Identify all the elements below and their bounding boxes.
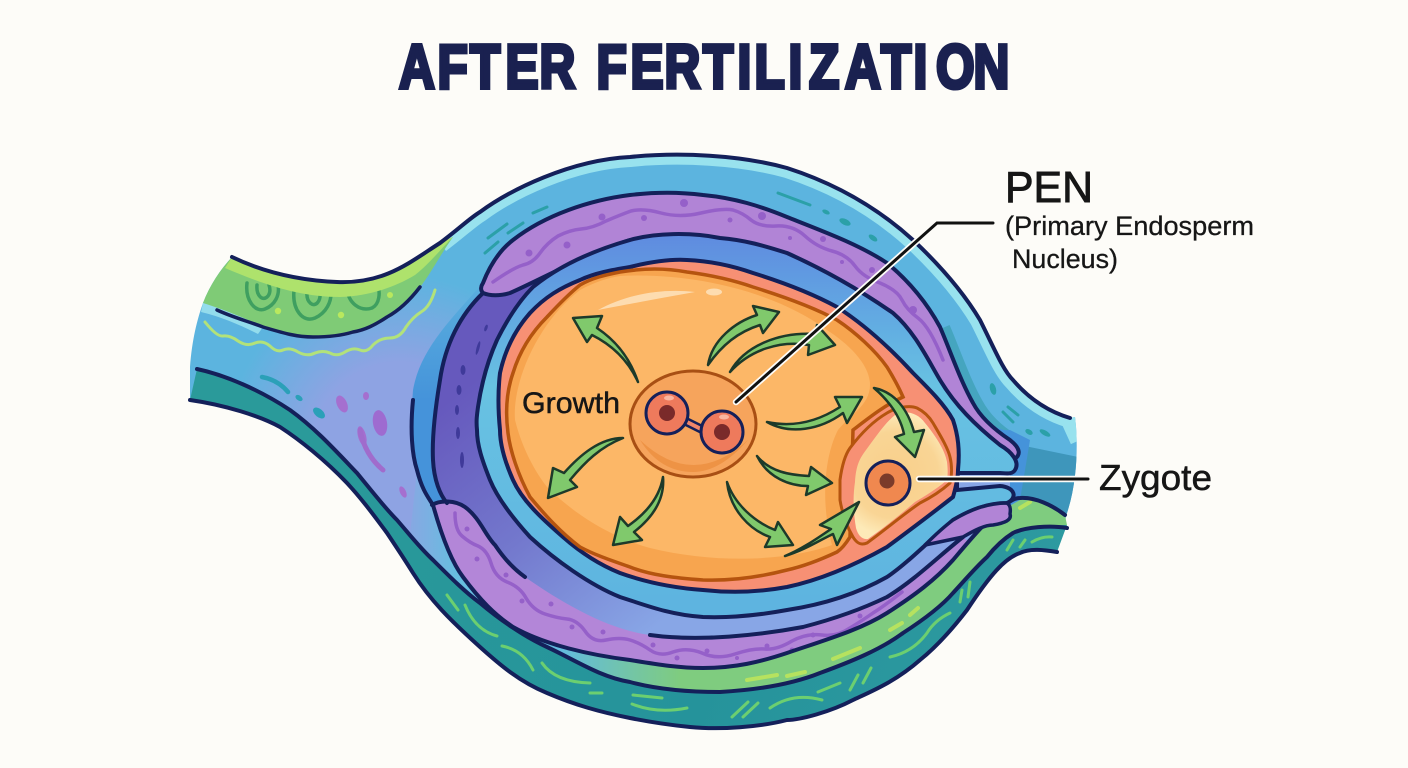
label: PEN: PEN	[1005, 163, 1093, 212]
teal outer band, bottom	[190, 369, 1067, 728]
dark purple layer	[434, 284, 1010, 636]
zygote cell	[840, 407, 952, 544]
dark structural lines	[190, 155, 1070, 728]
medium blue and inner layers	[412, 284, 1030, 666]
illustration: fertilized embryo sac cross-section	[190, 155, 1080, 728]
upper lavender layer	[481, 193, 1019, 460]
wavy lime line, left	[205, 290, 435, 355]
purple tip, lower right	[925, 503, 1010, 545]
upper lavender dots	[526, 199, 917, 314]
upper lavender wave	[493, 209, 943, 360]
zygote nucleus	[866, 461, 910, 505]
outer tissue body	[190, 156, 1077, 532]
medium blue band	[412, 298, 1030, 505]
growth arrows	[548, 306, 924, 556]
polar nucleus right	[701, 411, 743, 453]
green band, upper left	[201, 237, 453, 337]
polar nucleus left	[646, 392, 688, 434]
title: AFTER FERTILIZATION	[399, 32, 1009, 101]
highlight	[598, 291, 695, 310]
dark dashes in purple layer	[455, 324, 489, 468]
leader line: Zygote	[919, 476, 1088, 482]
lower lavender layer	[435, 504, 967, 666]
left tissue speckles	[262, 377, 408, 499]
primary endosperm nucleus	[630, 371, 756, 477]
central cell: orange cytoplasm	[507, 269, 903, 580]
blue layer around the sac	[477, 234, 1017, 617]
lower lavender wave	[455, 513, 902, 657]
connector between polar nuclei	[685, 421, 705, 431]
label: PEN: (Primary Endosperm	[1005, 211, 1254, 241]
label: PEN	[1005, 163, 1254, 274]
lime highlights	[747, 502, 1030, 680]
label: Zygote: Zygote	[1099, 457, 1212, 498]
green markings in teal band	[447, 537, 1052, 717]
top teal dashes	[485, 193, 1051, 438]
green and blue band, lower	[410, 470, 1067, 692]
salmon layer	[498, 260, 959, 592]
lower lavender dots	[464, 526, 862, 660]
label: PEN: Nucleus)	[1012, 244, 1118, 274]
label: Growth: Growth	[522, 387, 620, 420]
leader line: PEN	[736, 223, 993, 402]
